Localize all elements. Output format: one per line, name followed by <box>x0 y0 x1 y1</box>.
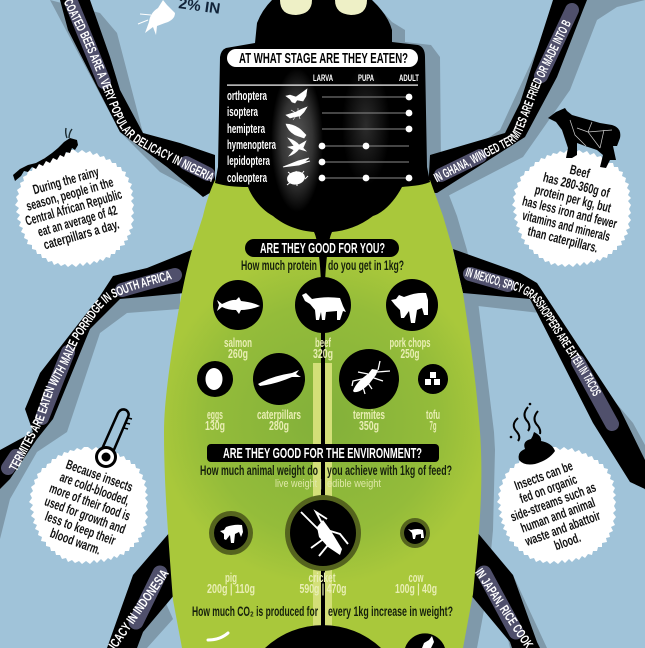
cow: 100g | 40g <box>395 582 437 596</box>
center line <box>313 280 332 648</box>
callout: side-streams: blood. <box>552 530 583 553</box>
subheading: feed: edible weight <box>327 478 381 490</box>
heading: are they good for you <box>245 239 399 257</box>
heading: are they good for you: ARE THEY GOOD FOR YOU? <box>260 240 385 257</box>
heading: good for the environment <box>207 444 439 462</box>
callout: side-streams: side-streams such as <box>508 480 598 524</box>
callout: caterpillars: During the rainy <box>31 164 101 197</box>
icon: dung and steam <box>510 403 555 464</box>
body shadow <box>272 0 495 648</box>
feed chart <box>207 495 437 596</box>
leg: Mexico: IN MEXICO, SPICY GRASSHOPPERS ARE EATEN IN TACOS <box>465 267 601 396</box>
callout: beef: than caterpillars. <box>526 224 600 255</box>
pig <box>207 511 255 596</box>
callout: cold-blooded: are cold-blooded, <box>58 469 132 508</box>
head and thorax <box>215 0 430 282</box>
salmon <box>213 280 263 361</box>
CO2 circles <box>208 625 445 648</box>
callout: caterpillars <box>13 128 134 267</box>
pork chops: 250g <box>400 347 420 361</box>
stage rows: orthoptera <box>227 89 268 103</box>
cow: cow <box>408 571 424 585</box>
callout: cold-blooded: used for growth and <box>43 494 128 537</box>
tofu: 7g <box>430 419 436 433</box>
icon: caterpillar <box>13 128 78 181</box>
pork chops <box>386 279 438 361</box>
tofu <box>418 364 448 433</box>
beef: 320g <box>313 347 333 361</box>
stage rows: hemiptera <box>227 122 266 136</box>
stage rows: coleoptera <box>227 171 268 185</box>
leg: Nigeria: COATED BEES ARE A VERY POPULAR DELICACY IN NIGERIA <box>64 0 214 182</box>
callout: caterpillars: eat an average of 42 <box>36 203 119 240</box>
subheading: feed: How much animal weight do <box>200 462 318 478</box>
stage headers: ADULT <box>399 73 419 83</box>
table heading: AT WHAT STAGE ARE THEY EATEN? <box>239 50 408 67</box>
tofu: tofu <box>426 408 440 422</box>
caterpillars <box>253 353 305 433</box>
callout: cold-blooded: Because insects <box>64 457 135 495</box>
subheading: feed <box>200 462 452 490</box>
salmon: 260g <box>228 347 248 361</box>
subheading: feed: live weight | <box>275 478 322 490</box>
stage headers <box>227 73 419 86</box>
callout: cold-blooded: more of their food is <box>47 480 132 524</box>
stage headers: LARVA <box>313 73 333 83</box>
pig: 200g | 110g <box>207 582 255 596</box>
leg: Japan <box>472 534 540 648</box>
green abdomen <box>164 180 481 648</box>
subheading: protein: How much protein <box>241 257 317 273</box>
callout: beef: has 280-360g of <box>542 170 612 201</box>
icon: fly <box>138 0 175 35</box>
caterpillars: 280g <box>269 419 289 433</box>
beef: beef <box>315 336 332 350</box>
stage rows <box>227 89 412 185</box>
leg: South Africa: TERMITES ARE EATEN WITH MAIZE PORRIDGE IN SOUTH AFRICA <box>8 271 172 470</box>
eyes <box>280 0 367 15</box>
termites: 350g <box>359 419 379 433</box>
subheading: CO2: How much CO₂ is produced for <box>192 603 318 619</box>
stage headers: PUPA <box>358 73 374 83</box>
eggs <box>197 361 233 433</box>
icon: thermometer <box>96 409 132 466</box>
callout: caterpillars: caterpillars a day. <box>42 217 121 252</box>
cricket <box>285 495 361 596</box>
eggs: eggs <box>207 408 223 422</box>
callout: side-streams: Insects can be <box>512 458 575 493</box>
eggs: 130g <box>205 419 225 433</box>
subheading: CO2: every 1kg increase in weight? <box>328 603 453 619</box>
heading: good for the environment: ARE THEY GOOD FOR THE ENVIRONMENT? <box>223 445 422 462</box>
cricket: 590g | 470g <box>300 582 346 596</box>
callout: cold-blooded: blood warm. <box>48 525 103 558</box>
callout: cold-blooded <box>29 409 148 564</box>
callout: side-streams: human and animal <box>519 495 597 536</box>
callout: beef: Beef <box>568 162 592 181</box>
subheading: protein: do you get in 1kg? <box>328 257 404 273</box>
leg: Ghana: IN GHANA, WINGED TERMITES ARE FRIED OR MADE INTO B <box>433 20 570 182</box>
stage rows: isoptera <box>227 105 259 119</box>
protein chart <box>197 277 448 433</box>
cricket: cricket <box>308 571 336 585</box>
callout: beef <box>512 108 631 267</box>
beef <box>295 277 351 361</box>
leg: Mexico <box>453 249 645 489</box>
termites <box>339 349 399 433</box>
stage rows: lepidoptera <box>227 154 271 168</box>
insect icons <box>283 89 310 186</box>
pork chops: pork chops <box>390 336 431 350</box>
callout: side-streams: fed on organic <box>518 471 579 506</box>
callout: side-streams: waste and abattoir <box>522 508 603 549</box>
table heading <box>227 49 418 67</box>
stage rows: hymenoptera <box>227 138 277 152</box>
subheading: feed: you achieve with 1kg of feed? <box>327 462 452 478</box>
cow <box>395 518 437 596</box>
termites: termites <box>353 408 385 422</box>
callout: side-streams <box>497 403 616 564</box>
salmon: salmon <box>224 336 252 350</box>
caterpillars: caterpillars <box>257 408 301 422</box>
callout: caterpillars: season, people in the <box>24 174 115 214</box>
icon: cow <box>548 108 620 168</box>
pig: pig <box>225 571 237 585</box>
table: at what stage are they eaten <box>227 49 419 212</box>
callout: caterpillars: Central African Republic <box>23 186 124 229</box>
callout: cold-blooded: less to keep their <box>43 509 118 548</box>
